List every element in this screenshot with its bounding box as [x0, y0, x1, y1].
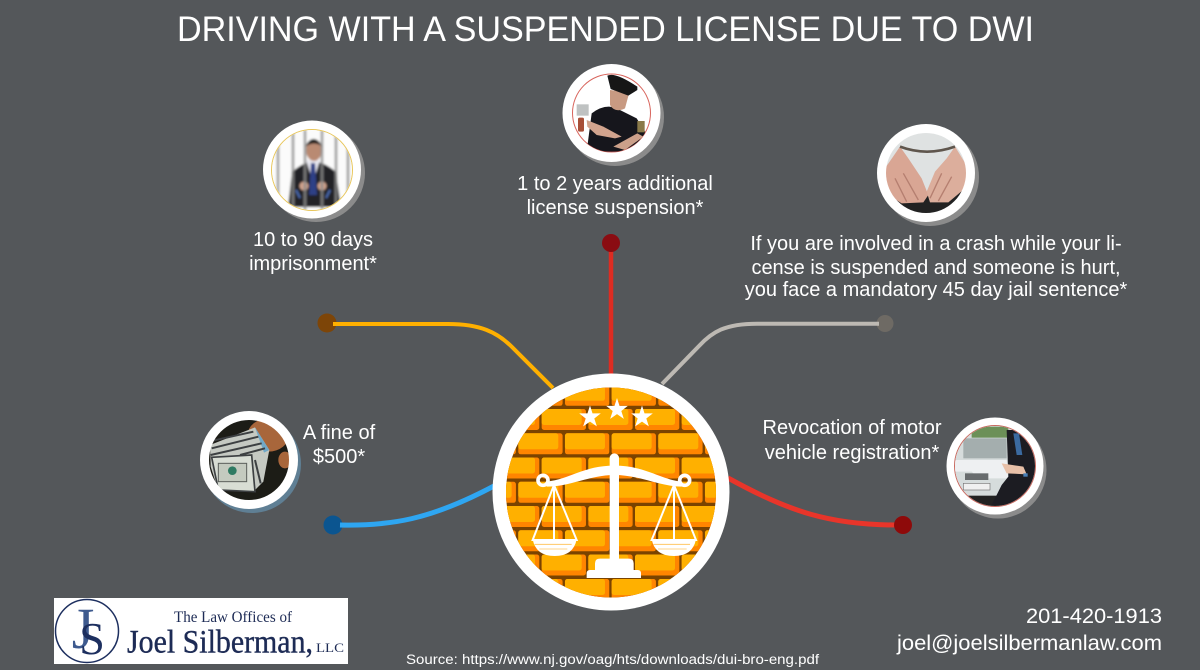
logo: Law Offices of Joel Silberman: The Law Offices of — [174, 609, 293, 626]
brick wall — [506, 388, 716, 598]
contact details — [896, 604, 1162, 655]
label: crash sentence — [745, 233, 1127, 301]
label: license suspension: 1 to 2 years additional — [517, 173, 713, 195]
label: license suspension: license suspension* — [527, 197, 704, 219]
label: fine — [303, 422, 376, 468]
label: crash sentence: cense is suspended and someone is hurt, — [751, 257, 1121, 279]
central emblem: scales on brick wall — [492, 374, 730, 610]
label: license suspension — [517, 173, 713, 219]
photo: car and document — [946, 418, 1046, 518]
icon: balance scales — [533, 453, 696, 578]
label: fine: A fine of — [303, 422, 376, 444]
contact details: joel@joelsilbermanlaw.com — [896, 631, 1162, 655]
logo: Law Offices of Joel Silberman: LLC — [316, 640, 344, 655]
icon: three stars — [579, 398, 653, 426]
connector: red line to license suspension — [602, 234, 620, 376]
logo: Law Offices of Joel Silberman — [54, 596, 348, 664]
label: crash sentence: If you are involved in a crash while your li- — [750, 233, 1122, 255]
photo: man behind bars — [263, 120, 365, 222]
label: imprisonment: 10 to 90 days — [253, 229, 373, 251]
connector: yellow line to imprisonment — [318, 314, 553, 388]
connector: red line to revocation — [728, 478, 912, 534]
icon: JS monogram — [56, 596, 118, 664]
contact details: 201-420-1913 — [1026, 604, 1162, 628]
logo: Law Offices of Joel Silberman: Joel Silberman, — [127, 624, 313, 660]
photo: dollar bills — [200, 411, 301, 513]
photo: police officer — [562, 64, 664, 166]
icon: JS monogram: S — [79, 613, 105, 664]
connector: grey line to crash sentence — [662, 315, 894, 384]
photo: handcuffed hands — [877, 124, 979, 226]
connector: blue line to fine — [324, 486, 494, 534]
icon: JS monogram: J — [72, 596, 94, 661]
label: imprisonment: imprisonment* — [249, 253, 377, 275]
label: crash sentence: you face a mandatory 45 day jail sentence* — [745, 279, 1127, 301]
title: DRIVING WITH A SUSPENDED LICENSE DUE TO DWI — [177, 10, 1034, 49]
label: imprisonment — [249, 229, 377, 275]
source note: Source: https://www.nj.gov/oag/hts/downloads/dui-bro-eng.pdf — [406, 652, 819, 667]
label: revocation: Revocation of motor — [763, 417, 942, 439]
label: fine: $500* — [313, 446, 365, 468]
label: revocation — [763, 417, 942, 464]
label: revocation: vehicle registration* — [765, 442, 939, 464]
